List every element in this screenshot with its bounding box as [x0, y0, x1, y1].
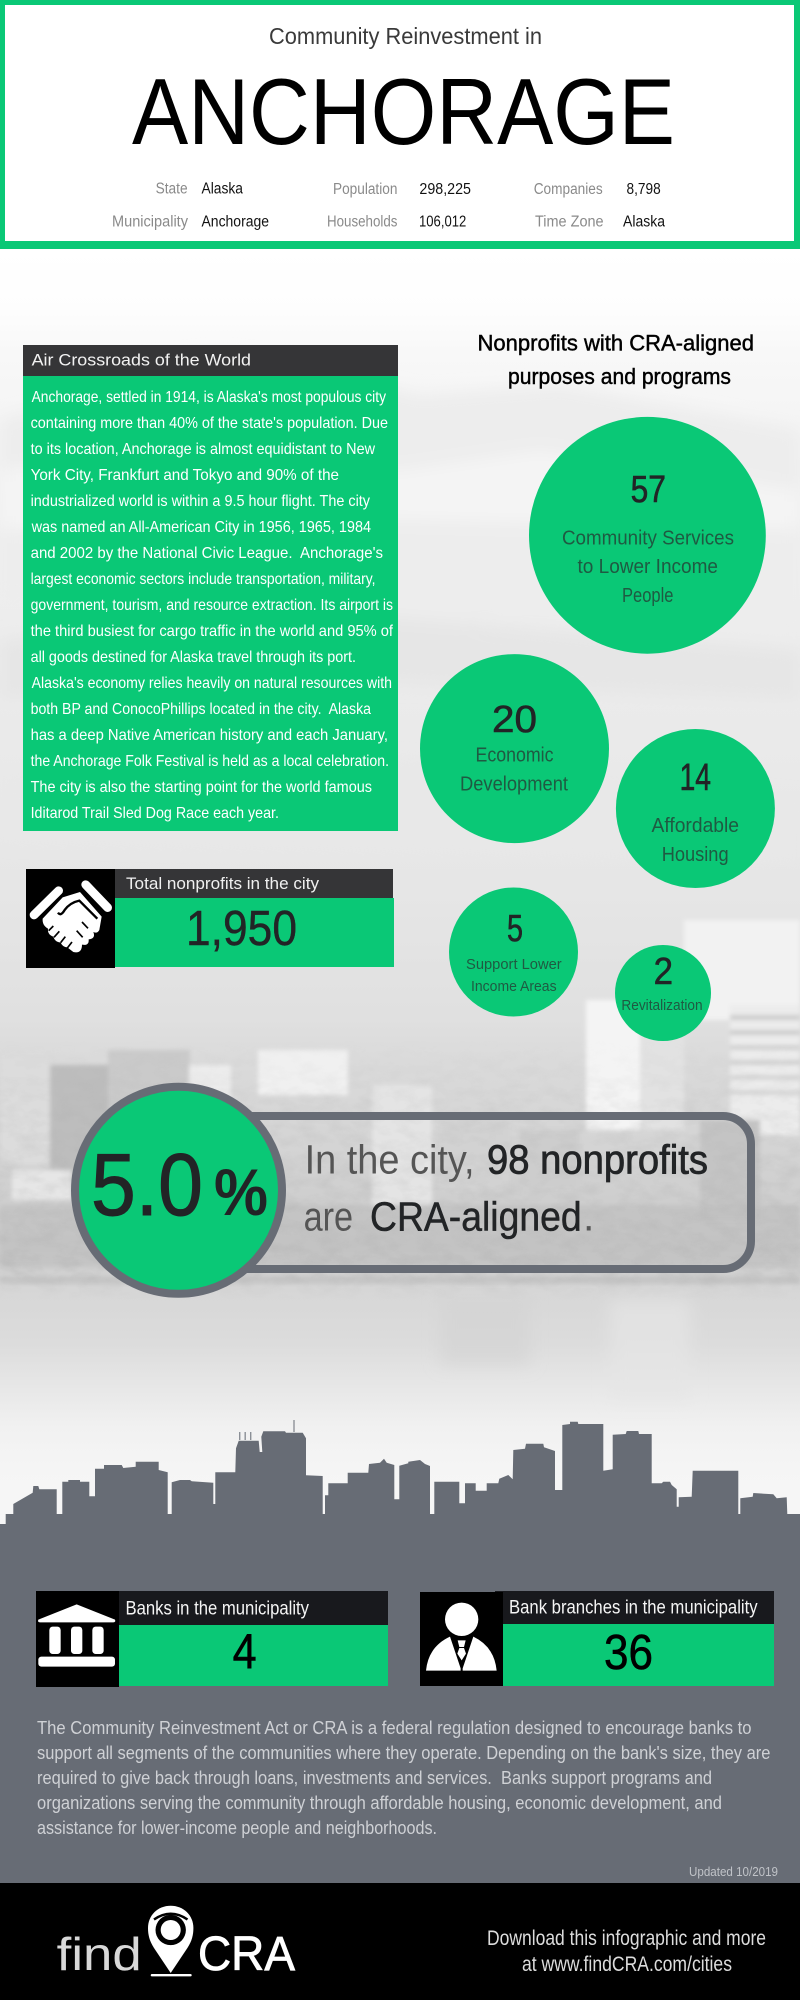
facts table: Anchorage: [202, 214, 269, 231]
callout: 5.0 percent CRA-aligned: [75, 1087, 751, 1294]
bubble: affordable housing: Affordable: [652, 815, 739, 837]
skyline silhouette and grey lower band: [0, 1420, 800, 1890]
body text: containing more than 40% of the state's population. Due: [31, 415, 388, 432]
logo: findCRA: find: [57, 1928, 142, 1980]
bubble: revitalization: Revitalization: [621, 998, 703, 1014]
logo: findCRA: [57, 1906, 295, 1981]
download call to action: at www.findCRA.com/cities: [522, 1953, 732, 1976]
bubble: economic development: [420, 654, 609, 843]
panel: Air Crossroads of the World: [23, 345, 398, 831]
text block: about the CRA: assistance for lower-income people and neighborhoods.: [37, 1818, 437, 1838]
bubble: economic development: Development: [460, 773, 568, 795]
bubble: support lower income areas: Support Lower: [466, 957, 562, 973]
facts table: 8,798: [626, 181, 661, 198]
header panel: [0, 0, 800, 249]
body text: government, tourism, and resource extraction. Its airport is: [31, 597, 393, 614]
callout text: 98 nonprofits: [487, 1136, 708, 1182]
callout text: In the city,: [305, 1136, 475, 1182]
body text: has a deep Native American history and each January,: [31, 727, 388, 744]
bubble: revitalization: [615, 945, 711, 1041]
body text: Alaska's economy relies heavily on natural resources with: [32, 675, 392, 692]
body text: and 2002 by the National Civic League. Anchorage's: [31, 545, 383, 562]
bubble: economic development: 20: [492, 699, 537, 741]
heading: nonprofits with CRA-aligned purposes: purposes and programs: [508, 364, 731, 389]
body text: the Anchorage Folk Festival is held as a local celebration.: [31, 753, 389, 770]
bubble: community services: to Lower Income: [578, 556, 718, 578]
bubble: economic development: Economic: [476, 744, 554, 766]
stat value: 1,950: [186, 902, 297, 956]
update date: Updated 10/2019: [689, 1864, 778, 1879]
body text: The city is also the starting point for the world famous: [31, 779, 372, 796]
facts table: State: [156, 180, 188, 197]
subtitle: Community Reinvestment in: [269, 23, 542, 49]
facts table: Municipality: [112, 214, 188, 231]
logo: findCRA: CRA: [198, 1928, 295, 1981]
callout text: are: [304, 1194, 353, 1240]
body text: largest economic sectors include transportation, military,: [31, 571, 375, 588]
facts table: [112, 180, 665, 231]
body text: all goods destined for Alaska travel through its port.: [31, 649, 356, 666]
body text: [31, 389, 394, 822]
icon: location pin: [148, 1906, 193, 1976]
background: faded city photo: [0, 366, 800, 1524]
facts table: Companies: [534, 181, 603, 198]
body text: Anchorage, settled in 1914, is Alaska's most populous city: [32, 389, 386, 406]
bubble: support lower income areas: 5: [507, 908, 523, 950]
percentage: [91, 1135, 268, 1234]
stat value: 36: [604, 1626, 653, 1680]
stat card: banks in the municipality: [36, 1591, 388, 1687]
stat card: bank branches in the municipality: [420, 1591, 774, 1686]
bubble: community services: [529, 417, 766, 654]
bubble: revitalization: 2: [654, 951, 673, 993]
bubble: affordable housing: [616, 729, 775, 888]
facts table: 298,225: [419, 181, 471, 198]
body text: the third busiest for cargo traffic in the world and 95% of: [31, 623, 394, 640]
facts table: Population: [333, 181, 397, 198]
body text: to its location, Anchorage is almost equidistant to New: [31, 441, 375, 458]
body text: York City, Frankfurt and Tokyo and 90% of the: [31, 467, 339, 484]
callout text: .: [583, 1194, 594, 1240]
bubble: affordable housing: 14: [680, 757, 711, 799]
body text: Iditarod Trail Sled Dog Race each year.: [31, 805, 279, 822]
stat label: Bank branches in the municipality: [509, 1597, 758, 1618]
panel heading: Air Crossroads of the World: [32, 350, 251, 370]
stat label: Total nonprofits in the city: [126, 874, 319, 893]
callout text: CRA-aligned: [370, 1194, 582, 1240]
icon: handshake: [26, 869, 115, 968]
bubble: support lower income areas: Income Areas: [471, 979, 557, 995]
facts table: Time Zone: [535, 214, 604, 231]
percentage: 5.0: [91, 1135, 203, 1234]
footer band: [0, 1883, 800, 2000]
heading: nonprofits with CRA-aligned purposes: [478, 331, 754, 389]
heading: nonprofits with CRA-aligned purposes: Nonprofits with CRA-aligned: [478, 331, 754, 356]
icon: person in suit: [420, 1592, 503, 1686]
title: ANCHORAGE: [132, 59, 675, 164]
text block: about the CRA: [37, 1718, 770, 1838]
stat value: 4: [233, 1625, 257, 1679]
text block: about the CRA: required to give back through loans, investments and services. Banks support programs and: [37, 1768, 712, 1788]
body text: both BP and ConocoPhillips located in the city. Alaska: [31, 701, 371, 718]
download call to action: [487, 1927, 766, 1976]
facts table: Alaska: [623, 214, 665, 231]
icon: bank building: [36, 1591, 119, 1687]
text block: about the CRA: The Community Reinvestment Act or CRA is a federal regulation designed to encourage banks to: [37, 1718, 752, 1738]
bubble: community services: Community Services: [562, 528, 734, 550]
facts table: 106,012: [419, 213, 466, 230]
text block: about the CRA: organizations serving the community through affordable housing, economic development, and: [37, 1793, 722, 1813]
bubble: community services: 57: [631, 469, 666, 511]
body text: industrialized world is within a 9.5 hour flight. The city: [31, 493, 370, 510]
facts table: Households: [327, 213, 398, 230]
body text: was named an All-American City in 1956, 1965, 1984: [31, 519, 371, 536]
percentage: %: [214, 1155, 268, 1229]
bubble: support lower income areas: [449, 888, 578, 1016]
bubble: community services: People: [622, 585, 674, 607]
callout text: [304, 1136, 708, 1240]
stat label: Banks in the municipality: [126, 1598, 309, 1619]
facts table: Alaska: [202, 180, 243, 197]
stat card: total nonprofits: [26, 869, 394, 968]
bubble: affordable housing: Housing: [662, 844, 729, 866]
